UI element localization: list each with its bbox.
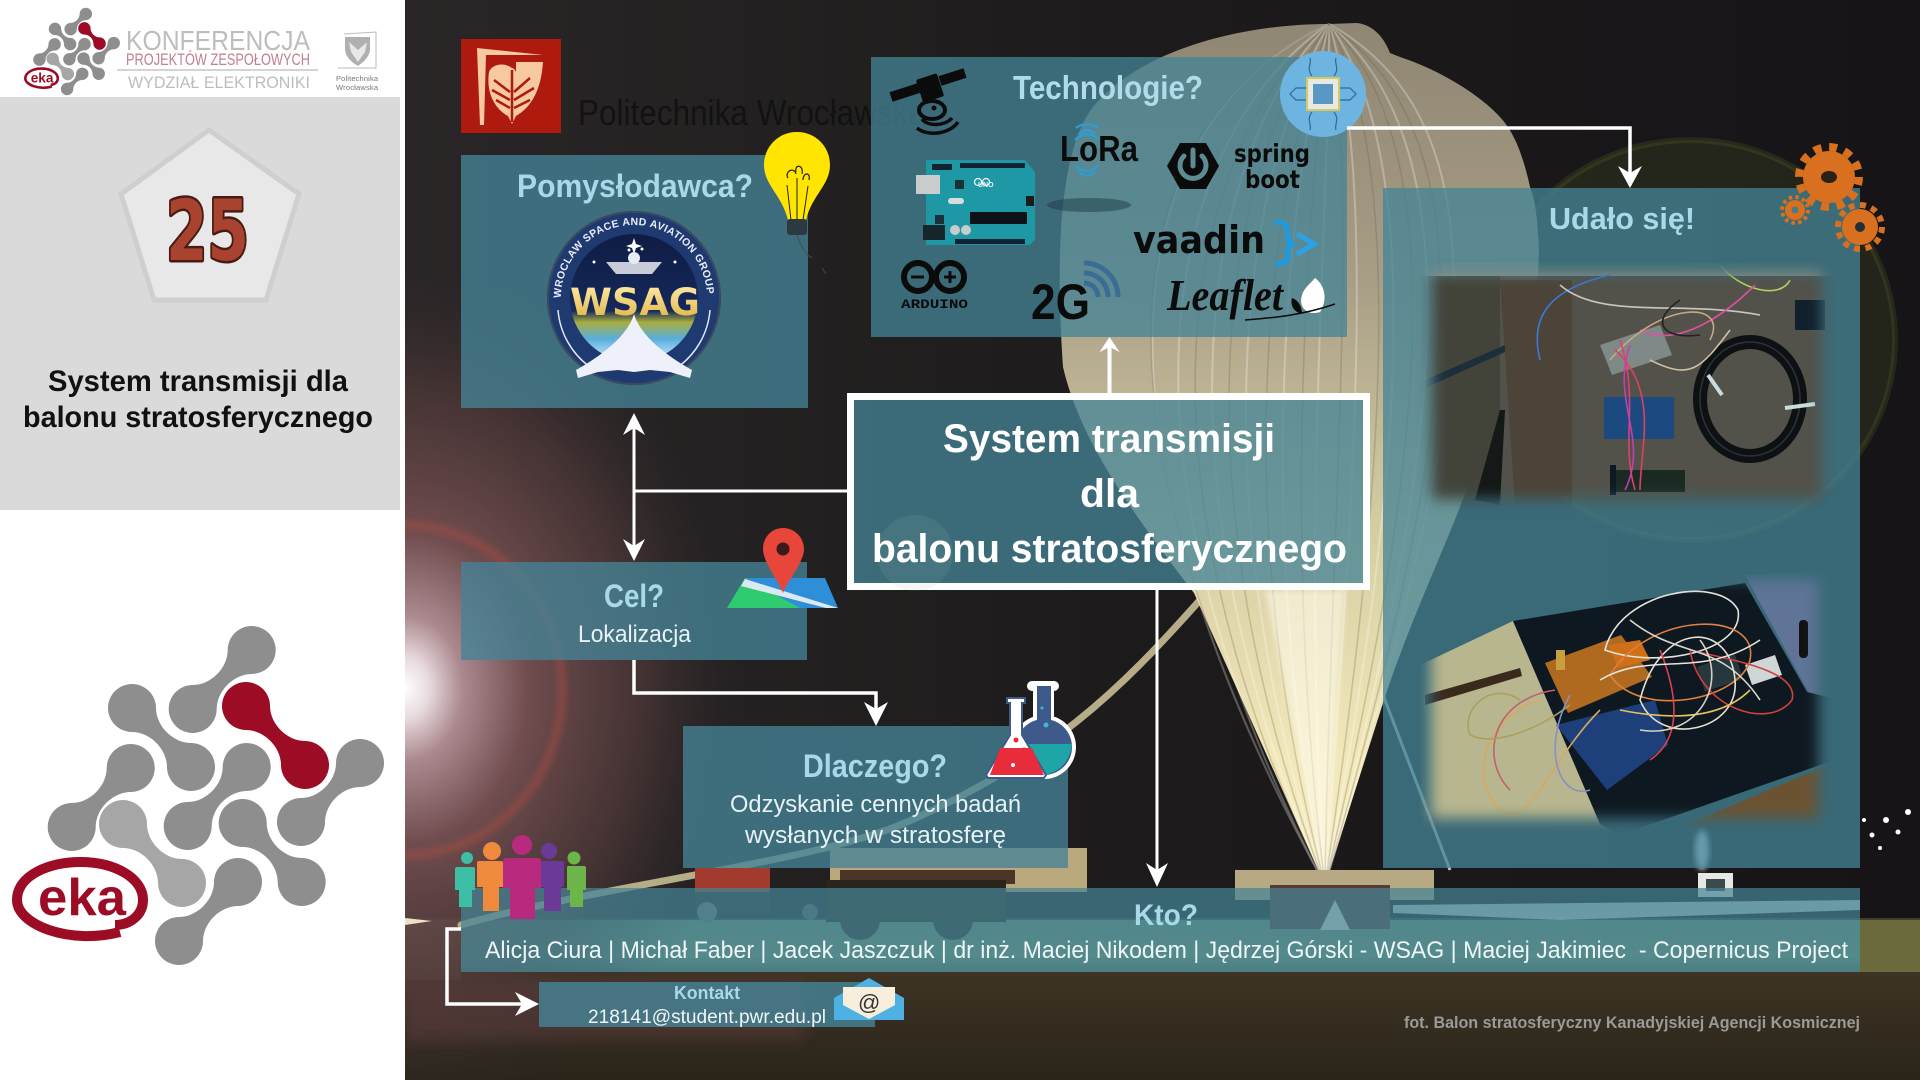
WSAG badge: WROCLAW SPACE AND AVIATION GROUP (554, 218, 714, 298)
logo: Spring Boot: boot (1245, 165, 1300, 194)
central title (872, 417, 1347, 571)
photo: electronics in cardboard box (1422, 264, 1828, 508)
central title: dla (1080, 472, 1140, 516)
panel: Technologie (871, 57, 1347, 337)
header faculty name: WYDZIAŁ ELEKTRONIKI (128, 73, 310, 92)
panel: Pomysłodawca (461, 155, 808, 408)
central title: System transmisji (943, 417, 1275, 461)
text: Dlaczego explanation (730, 791, 1021, 849)
icon: e-mail envelope (834, 978, 904, 1020)
panel: Udało się (1383, 188, 1860, 868)
photo credit: fot. Balon stratosferyczny Kanadyjskiej Agencji Kosmicznej (1404, 1013, 1860, 1032)
arrow: title to Technologie (1100, 337, 1120, 393)
icon: Arduino Uno board (916, 160, 1035, 245)
arrow: Kto to Kontakt (447, 929, 539, 1016)
panel: Cel (461, 562, 807, 660)
WSAG badge: WSAG (570, 281, 700, 324)
header university emblem: Wrocławska (336, 83, 379, 92)
icon: Arduino Uno board: UNO (978, 182, 994, 189)
header small logo (25, 8, 120, 95)
truck and loads (830, 848, 1087, 892)
panel: Kontakt (539, 982, 875, 1028)
text: e-mail address: 218141@student.pwr.edu.pl (588, 1007, 826, 1028)
text: team members: Alicja Ciura | Michał Faber | Jacek Jaszczuk | dr inż. Maciej Nikodem | Jędrzej Górski - WSAG | Maciej Jakimiec - Copernicus Project (485, 937, 1848, 964)
icon: light bulb (764, 132, 830, 274)
header subtitle: PROJEKTÓW ZESPOŁOWYCH (126, 50, 310, 69)
heading: Pomysłodawca: Pomysłodawca? (517, 168, 753, 204)
arrow: title to Kto (1146, 590, 1168, 887)
project number: 25 (166, 182, 249, 280)
large EKA logo (17, 626, 384, 965)
university logo: Politechnika Wrocławska: Politechnika Wrocławska (578, 92, 927, 133)
arrow: title to Pomysłodawca and Cel (623, 413, 847, 561)
logo: 2G: 2G (1031, 274, 1090, 330)
heading: Udało się: Udało się! (1549, 201, 1695, 236)
project title: System transmisji dla (48, 365, 348, 398)
header: conference logo bar (25, 8, 379, 95)
header conference title: KONFERENCJA (126, 25, 310, 56)
heading: Cel: Cel? (604, 578, 664, 614)
header university emblem: Politechnika (336, 74, 379, 83)
arrow: Cel to Dlaczego (634, 660, 888, 726)
pentagon badge (121, 130, 299, 300)
panel: project number and title (0, 97, 400, 510)
logo: Vaadin: vaadin (1133, 218, 1265, 262)
panel: Dlaczego (683, 726, 1068, 868)
logo: Spring Boot: spring (1234, 139, 1310, 168)
text: Dlaczego explanation: Odzyskanie cennych badań (730, 791, 1021, 818)
project title: balonu stratosferycznego (23, 401, 373, 434)
central title: balonu stratosferycznego (872, 527, 1347, 571)
header university emblem (336, 32, 379, 92)
icon: e-mail envelope: @ (858, 990, 880, 1015)
icon: chemistry flasks (986, 681, 1076, 779)
arrow: Technologie to Udało się (1347, 128, 1642, 188)
logo: Arduino: ARDUINO (901, 297, 968, 312)
logo: 2G (1031, 263, 1118, 330)
icon: map pin (727, 528, 838, 608)
WSAG badge (547, 211, 721, 385)
heading: Dlaczego: Dlaczego? (803, 748, 947, 784)
project title (23, 365, 373, 434)
heading: Technologie: Technologie? (1013, 69, 1203, 106)
heading: Kontakt: Kontakt (674, 983, 740, 1003)
university logo: Politechnika Wrocławska (461, 39, 927, 133)
heading: Kto: Kto? (1134, 899, 1198, 932)
icon: microchip (1280, 51, 1366, 137)
panel: Kto (461, 888, 1860, 972)
large EKA logo: eka (38, 869, 127, 927)
panel: central title box (850, 396, 1366, 591)
icon: team of people (455, 835, 586, 919)
header small logo: eka (31, 70, 54, 85)
photo: electronics on desk (1420, 570, 1840, 840)
logo: LoRa: LoRa (1060, 128, 1139, 169)
logo: Spring Boot (1167, 139, 1310, 194)
text: Lokalizacja: Lokalizacja (578, 621, 692, 648)
icon: satellite (891, 73, 965, 133)
left column background (0, 0, 405, 1080)
icon: orange gears (1782, 147, 1882, 249)
text: Dlaczego explanation: wysłanych w stratosferę (744, 822, 1006, 849)
logo: Leaflet: Leaflet (1166, 271, 1285, 320)
logo: Arduino (901, 263, 968, 312)
